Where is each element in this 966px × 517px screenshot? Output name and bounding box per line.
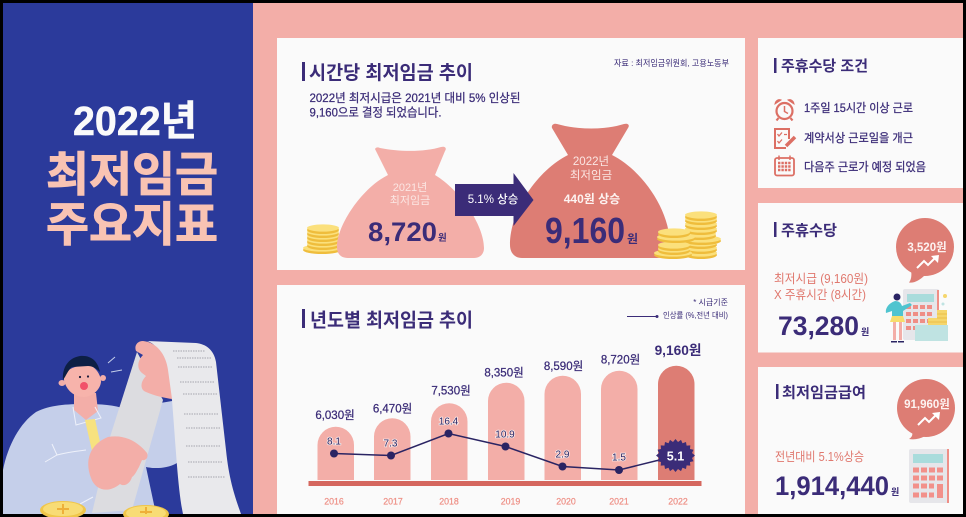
- money bag: 2022: 원: [627, 232, 638, 246]
- line chart: raise rate: 1.5: [612, 452, 626, 464]
- heading: allowance: 주휴수당: [781, 222, 837, 240]
- description text: [310, 91, 520, 120]
- icon: contract document: [775, 129, 795, 148]
- formula text: 최저시급 (9,160원): [774, 272, 868, 286]
- bar chart: 2016: [324, 496, 344, 506]
- description text: 9,160으로 결정 되었습니다.: [310, 106, 442, 120]
- title: 최저임금: 최저임금: [46, 148, 218, 201]
- icon: coin stack left: [303, 224, 341, 254]
- bar chart: 2019: [501, 496, 520, 506]
- value: 73,280원: 원: [861, 326, 869, 337]
- formula text: X 주휴시간 (8시간): [774, 288, 866, 302]
- formula text: [774, 272, 868, 302]
- title: 2022년: 2022년: [73, 98, 197, 144]
- line chart: raise rate: 8.1: [327, 436, 341, 448]
- panel: left title sidebar: [3, 3, 253, 514]
- bar chart: 2018: [439, 496, 459, 506]
- line chart: raise rate: 10.9: [495, 430, 515, 440]
- badge: 5.1: [656, 439, 695, 472]
- money bag: 2021: 원: [438, 232, 447, 244]
- icon: calculator: [909, 449, 949, 503]
- arrow: 5.1% rise: [455, 173, 534, 226]
- panel: hourly minimum wage trend: [277, 38, 745, 270]
- description text: 2022년 최저시급은 2021년 대비 5% 인상된: [310, 91, 520, 105]
- bar chart: [308, 343, 702, 506]
- bar chart: 6,030원: [315, 408, 355, 422]
- bar chart: 2022: [668, 496, 688, 506]
- line chart: raise rate: [327, 416, 695, 474]
- money bag: 2021: [337, 147, 484, 258]
- value: 1,914,440원: 원: [891, 486, 899, 497]
- legend: [627, 298, 728, 320]
- money bag: 2022: [510, 124, 670, 258]
- bar chart: 8,720원: [601, 352, 640, 366]
- callout: 91,960원: 91,960원: [904, 397, 950, 411]
- money bag: 2021: 8,720: [368, 217, 437, 247]
- bar chart: 9,160원: [655, 343, 701, 358]
- callout: 3,520원: 3,520원: [907, 240, 947, 254]
- bar chart: 8,350원: [484, 366, 524, 380]
- bar chart: 2021: [609, 496, 629, 506]
- bar chart: 2020: [556, 496, 576, 506]
- money bag: 2022: 440원 상승: [564, 192, 620, 206]
- year-over-year text: 전년대비 5.1%상승: [775, 450, 864, 464]
- bar chart: 8,590원: [544, 359, 583, 373]
- source note: 자료 : 최저임금위원회, 고용노동부: [614, 58, 729, 68]
- callout: 91,960원: [897, 379, 955, 439]
- money bag: 2022: 2022년: [573, 155, 609, 168]
- icon: calendar: [775, 156, 794, 176]
- illustration: woman with calculator: [886, 289, 948, 342]
- title: 주요지표: 주요지표: [46, 198, 218, 251]
- condition text 2: 계약서상 근로일을 개근: [804, 130, 913, 145]
- condition text 1: 1주일 15시간 이상 근로: [804, 101, 913, 115]
- line chart: raise rate: 7.3: [384, 438, 398, 450]
- heading: monthly pay: 최저임금급여: [782, 384, 866, 402]
- bar chart: 7,530원: [431, 384, 471, 398]
- icon: coin stacks right: [654, 211, 721, 259]
- money bag: 2021: 최저임금: [390, 194, 430, 207]
- legend: * 시급기준: [693, 298, 728, 307]
- panel: weekly holiday allowance: [758, 203, 963, 352]
- line chart: raise rate: 16.4: [439, 416, 459, 428]
- money bag: 2021: 2021년: [393, 181, 427, 194]
- heading: yearly minimum wage: 년도별 최저임금 추이: [310, 310, 473, 332]
- value: 1,914,440원: 1,914,440: [775, 471, 889, 501]
- arrow: 5.1% rise: 5.1% 상승: [468, 193, 519, 206]
- condition text 3: 다음주 근로가 예정 되었음: [804, 160, 926, 174]
- money bag: 2022: 최저임금: [570, 169, 612, 182]
- money bag: 2022: 9,160: [545, 210, 625, 251]
- callout: 3,520원: [896, 218, 954, 283]
- legend: 인상률 (%,전년 대비): [663, 310, 728, 320]
- value: 73,280원: 73,280: [778, 311, 859, 341]
- bar chart: 2017: [383, 496, 403, 506]
- bar chart: 6,470원: [373, 402, 412, 416]
- badge: 5.1: 5.1: [667, 450, 684, 464]
- illustration: man reading a long receipt: [3, 341, 241, 517]
- panel: weekly holiday allowance conditions: [758, 38, 963, 188]
- heading: conditions: 주휴수당 조건: [781, 58, 868, 75]
- line chart: raise rate: 2.9: [556, 450, 570, 460]
- heading: hourly minimum wage: 시간당 최저임금 추이: [309, 62, 473, 84]
- panel: yearly minimum wage trend: [277, 285, 745, 514]
- panel: minimum wage monthly pay: [758, 367, 963, 514]
- icon: alarm clock: [775, 100, 794, 120]
